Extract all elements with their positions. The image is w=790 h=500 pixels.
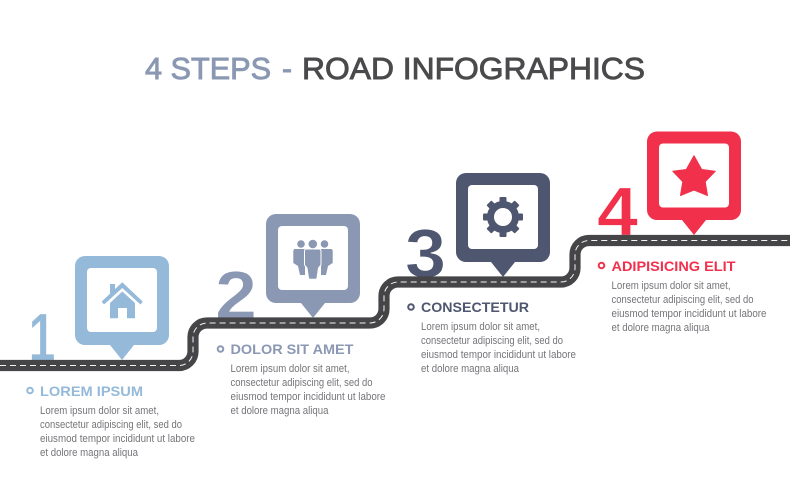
step number 3: 3 xyxy=(405,215,446,292)
body 2: et dolore magna aliqua xyxy=(230,405,328,417)
heading 4: ADIPISICING ELIT xyxy=(612,258,736,274)
body 3: Lorem ipsum dolor sit amet, xyxy=(421,321,540,333)
bullet 4 xyxy=(599,263,604,268)
title: 4 STEPS xyxy=(145,51,271,86)
title: - xyxy=(282,51,292,86)
pin: step 3 gear xyxy=(456,173,550,277)
body 4: Lorem ipsum dolor sit amet, xyxy=(612,280,730,292)
title: ROAD INFOGRAPHICS xyxy=(302,51,645,86)
body 3: et dolore magna aliqua xyxy=(421,363,519,375)
icon: house xyxy=(102,282,143,318)
body 3 xyxy=(421,321,576,375)
body 1 xyxy=(40,405,195,459)
title xyxy=(145,51,645,86)
body 3: eiusmod tempor incididunt ut labore xyxy=(421,349,576,361)
body 1: et dolore magna aliqua xyxy=(40,447,138,459)
body 2: consectetur adipiscing elit, sed do xyxy=(230,377,372,389)
body 4: et dolore magna aliqua xyxy=(612,322,710,334)
body 2: eiusmod tempor incididunt ut labore xyxy=(230,391,386,403)
pin: step 4 star xyxy=(647,132,741,235)
heading 2: DOLOR SIT AMET xyxy=(230,341,354,357)
pin: step 2 people xyxy=(266,214,360,318)
bullet 1 xyxy=(27,388,33,393)
body 2: Lorem ipsum dolor sit amet, xyxy=(230,363,350,375)
body 1: consectetur adipiscing elit, sed do xyxy=(40,419,182,431)
body 1: eiusmod tempor incididunt ut labore xyxy=(40,433,195,445)
step number 2: 2 xyxy=(215,257,257,334)
body 1: Lorem ipsum dolor sit amet, xyxy=(40,405,159,417)
heading 1: LOREM IPSUM xyxy=(40,383,143,399)
pin: step 1 home xyxy=(75,256,169,360)
step 1 text xyxy=(27,383,195,459)
road xyxy=(0,240,790,366)
bullet 3 xyxy=(408,304,414,310)
icon: people xyxy=(293,240,333,279)
step number 4: 4 xyxy=(597,173,638,250)
body 2 xyxy=(230,363,386,417)
heading 3: CONSECTETUR xyxy=(421,299,529,315)
body 3: consectetur adipiscing elit, sed do xyxy=(421,335,563,347)
body 4: consectetur adipiscing elit, sed do xyxy=(612,294,754,306)
icon: star xyxy=(673,156,715,196)
step 3 text xyxy=(408,299,576,375)
body 4 xyxy=(612,280,766,334)
step 2 text xyxy=(218,341,386,417)
body 4: eiusmod tempor incididunt ut labore xyxy=(612,308,766,320)
bullet 2 xyxy=(218,346,223,352)
icon: gear xyxy=(483,197,523,237)
step 4 text xyxy=(599,258,766,334)
step number 1: 1 xyxy=(28,299,56,376)
